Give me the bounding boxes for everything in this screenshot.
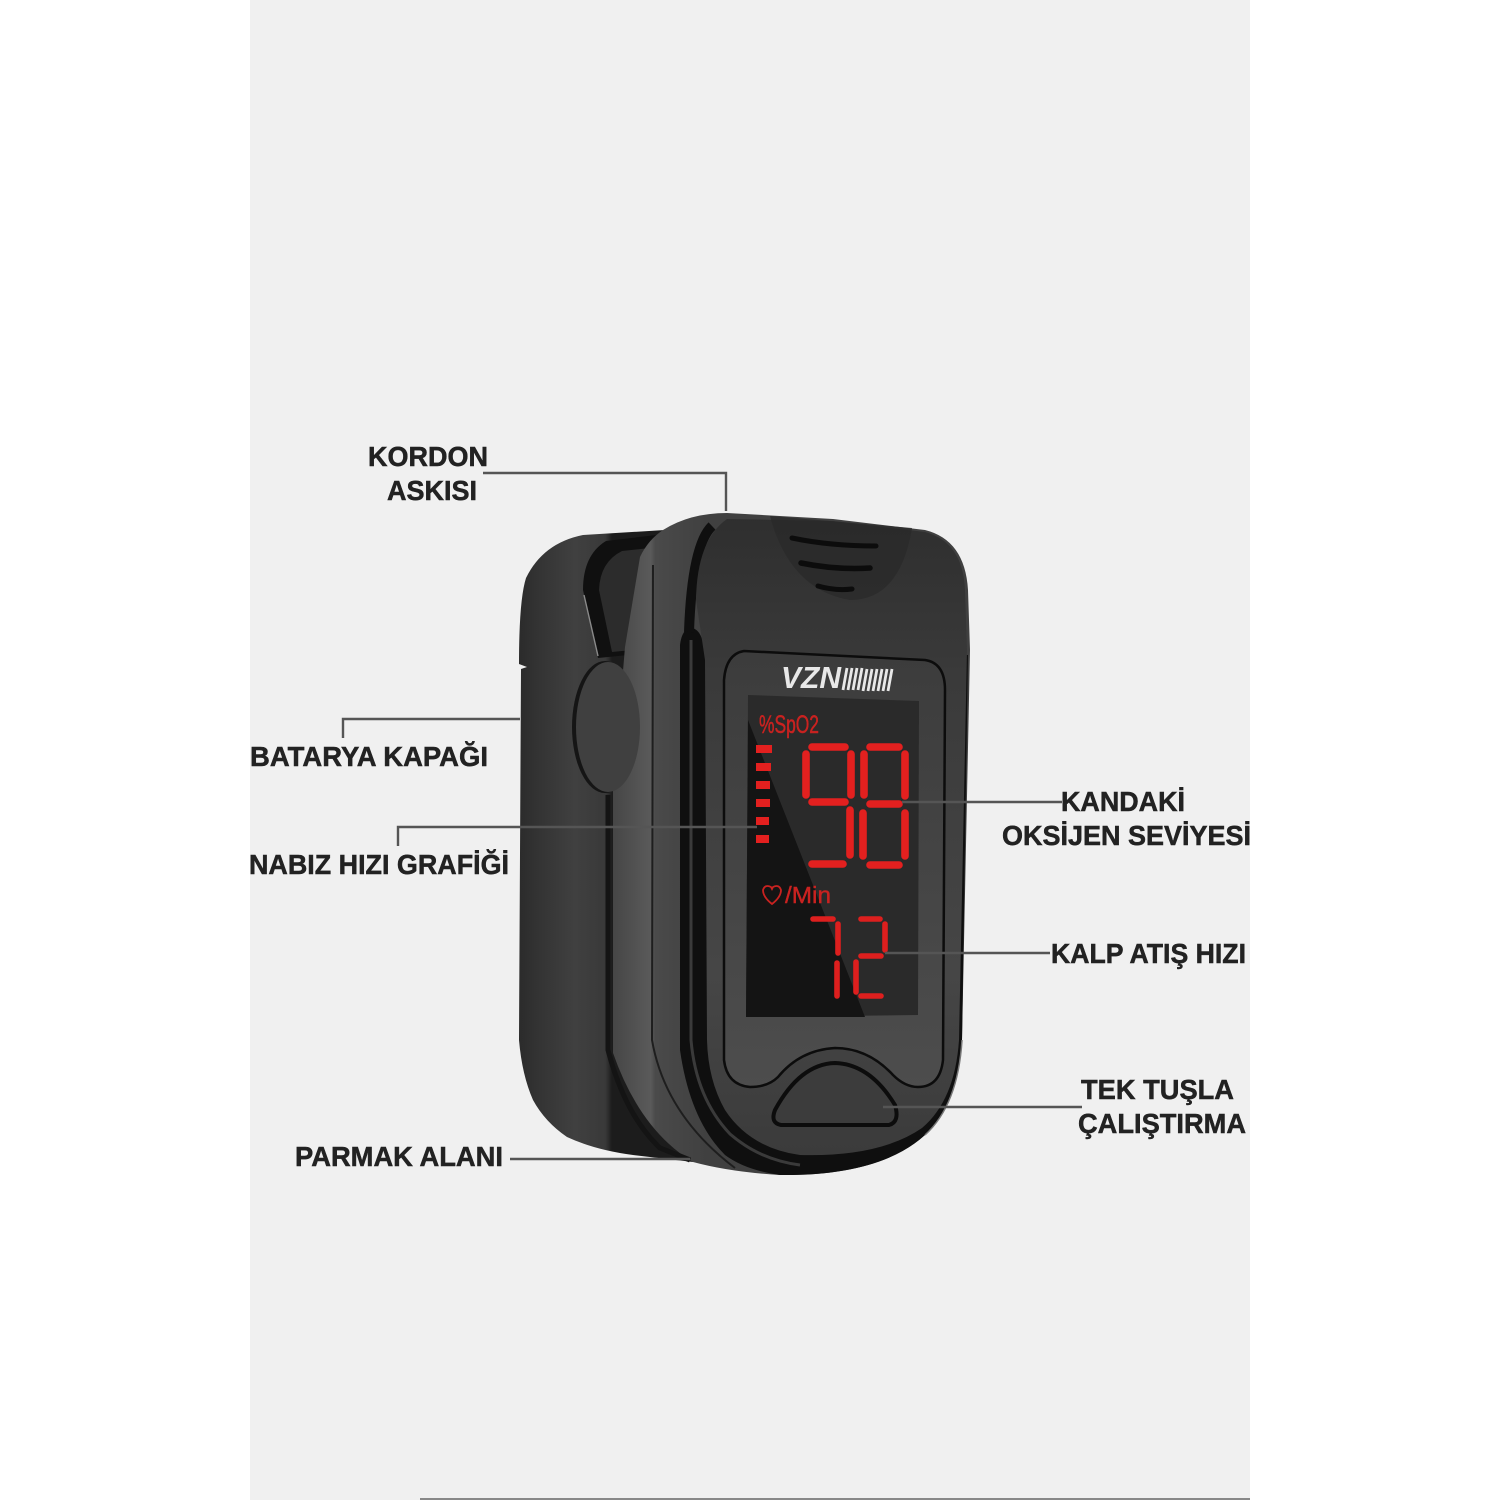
lanyard opening [583,534,665,658]
label: single button operation [883,1074,1246,1139]
label: single button operation: ÇALIŞTIRMA [1078,1108,1246,1139]
vent shading [770,516,912,600]
display diagonal reflection [746,720,865,1017]
label: pulse graph: NABIZ HIZI GRAFİĞİ [249,849,509,880]
label: battery cover [250,719,520,772]
bottom edge line [420,1498,1250,1500]
device black rim [680,628,968,1175]
label: blood oxygen level: KANDAKİ [1061,786,1185,817]
vent slots [792,538,876,590]
device clip arm [613,513,970,1175]
label: finger area: PARMAK ALANI [295,1141,503,1172]
screen panel [724,651,945,1087]
SpO2 reading 98 [806,747,905,865]
label: blood oxygen level [902,786,1251,851]
battery cover disc [572,661,640,793]
brand logo: VZN [781,660,842,695]
heart rate reading 72 [813,919,885,996]
device back body [519,530,700,1162]
label: battery cover: BATARYA KAPAĞI [250,741,488,772]
power button [773,1063,897,1125]
device: pulse oximeter [519,513,970,1175]
heart icon [763,886,781,904]
label: blood oxygen level: OKSİJEN SEVİYESİ [1002,820,1251,851]
label: lanyard: ASKISI [387,475,477,506]
brand logo [781,660,892,695]
label: heart rate: KALP ATIŞ HIZI [1051,938,1246,969]
pulse bar graph [756,745,772,843]
display background [746,695,919,1017]
label: single button operation: TEK TUŞLA [1081,1074,1234,1105]
label: lanyard: KORDON [368,441,488,472]
SpO2 label: %SpO2 [759,711,819,739]
device front face [696,519,967,1155]
label: pulse graph [249,827,757,880]
per minute label: /Min [785,882,831,908]
label: lanyard [368,441,726,511]
background panel [250,0,1250,1500]
